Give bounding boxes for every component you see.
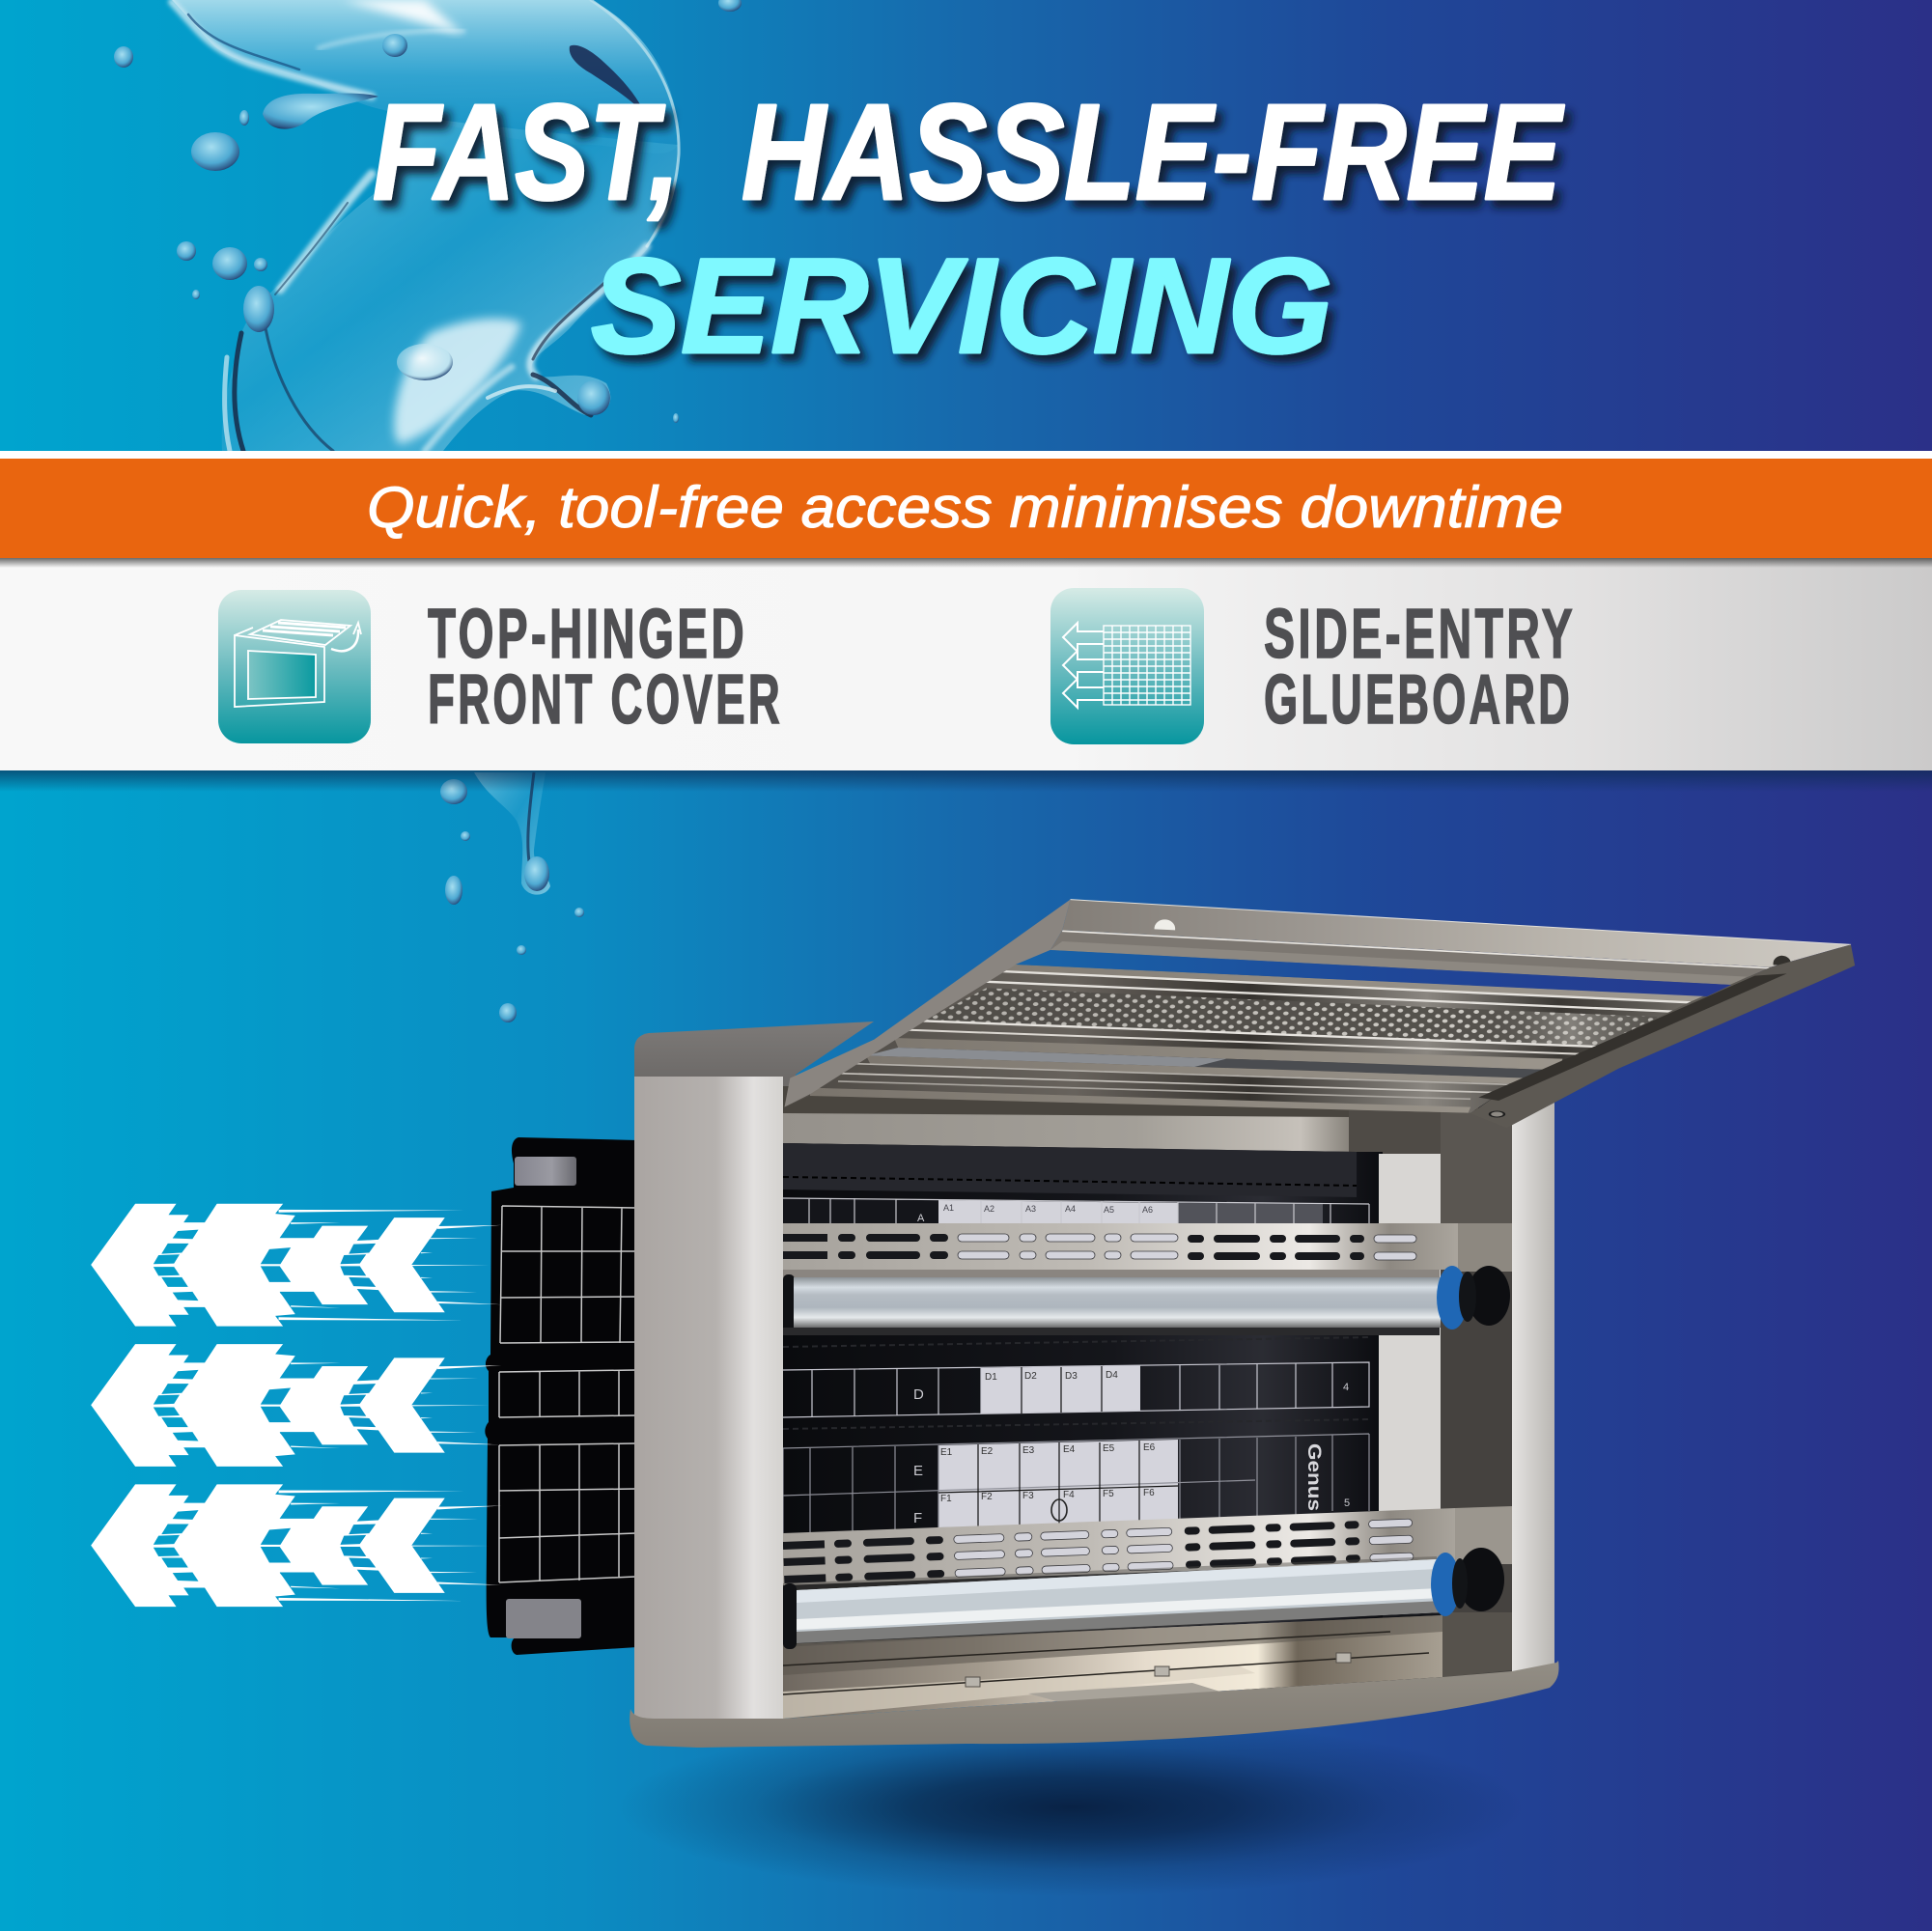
row A cells xyxy=(783,1198,1369,1224)
rows below the top plate xyxy=(783,1362,1369,1535)
bottom cap xyxy=(630,1661,1559,1748)
lower perforated plate xyxy=(783,1506,1512,1585)
interior back xyxy=(783,1086,1517,1690)
speed arrows row 1 xyxy=(91,1204,501,1327)
splash: highlights and dark edges xyxy=(172,0,679,451)
black glueboard inside: D4 xyxy=(1106,1370,1118,1381)
black glueboard inside: E5 xyxy=(1103,1443,1115,1454)
black glueboard inside: E1 xyxy=(940,1447,953,1458)
feature text: side-entry glueboard xyxy=(1264,596,1576,739)
hinged front cover xyxy=(784,900,1855,1128)
row A cells: A6 xyxy=(1142,1205,1153,1215)
orange subtitle banner: Quick, tool-free access minimises downtime xyxy=(367,475,1563,540)
black glueboard inside: E2 xyxy=(981,1446,994,1457)
row A cells: A5 xyxy=(1104,1205,1114,1215)
black glueboard inside: D1 xyxy=(985,1372,997,1383)
black glueboard inside: F5 xyxy=(1103,1489,1114,1499)
top metal panel xyxy=(780,1067,1478,1155)
row A cells: A2 xyxy=(984,1204,994,1214)
black glueboard inside: D3 xyxy=(1065,1371,1078,1382)
black glueboard inside: E xyxy=(913,1463,923,1479)
row A cells: A1 xyxy=(943,1203,954,1213)
lower UV tube xyxy=(783,1548,1504,1649)
black glueboard inside: E3 xyxy=(1022,1445,1035,1456)
feature text: side-entry glueboard: SIDE-ENTRY xyxy=(1264,596,1576,673)
row A cells: A xyxy=(917,1213,925,1224)
splash: glare patches xyxy=(394,319,521,444)
lower metal tray xyxy=(783,1612,1512,1719)
black glueboard inside xyxy=(783,1143,1383,1651)
lower water drip xyxy=(440,772,584,1022)
black glueboard inside: F xyxy=(913,1510,922,1526)
perforated vent area xyxy=(926,988,1659,1046)
cover left rail xyxy=(784,900,1070,1107)
black glueboard inside: F2 xyxy=(981,1492,993,1502)
black glueboard inside: Genus xyxy=(1303,1443,1324,1511)
glueboard grid xyxy=(499,1206,635,1582)
black glueboard inside: F6 xyxy=(1143,1488,1155,1498)
icon: side-entry glueboard xyxy=(1050,588,1204,744)
feature text: top-hinged front cover: FRONT COVER xyxy=(428,661,783,739)
feature text: top-hinged front cover: TOP-HINGED xyxy=(428,596,747,673)
feature text: side-entry glueboard: GLUEBOARD xyxy=(1264,661,1573,739)
black glueboard inside: D xyxy=(913,1386,924,1403)
icon: top-hinged front cover xyxy=(218,590,371,743)
title: SERVICING xyxy=(591,230,1332,381)
splash: dark streak in upper lobe xyxy=(570,45,645,114)
grey feature panel xyxy=(0,558,1932,770)
speed arrows row 2 xyxy=(91,1344,501,1467)
water splash illustration xyxy=(114,0,742,451)
right pillar xyxy=(1512,1103,1554,1673)
white rule above orange banner xyxy=(0,451,1932,459)
panel shadow xyxy=(0,770,1932,792)
drops around the splash xyxy=(114,0,742,423)
cover opening xyxy=(1016,950,1731,996)
floor shadow under product xyxy=(618,1719,1526,1896)
right interior side wall xyxy=(1441,1110,1512,1680)
upper UV tube xyxy=(783,1266,1510,1335)
title: HASSLE-FREE xyxy=(742,75,1564,228)
top perforated plate xyxy=(783,1223,1512,1272)
black glueboard inside: F1 xyxy=(940,1494,952,1504)
splash: mid body xyxy=(222,114,678,451)
black glueboard inside: E4 xyxy=(1063,1444,1076,1455)
row A cells: A3 xyxy=(1025,1204,1036,1214)
cover: slat tray underside xyxy=(784,965,1707,1113)
speed arrows row 3 xyxy=(91,1484,501,1607)
splash: upper lobe xyxy=(172,0,678,154)
black glueboard inside: D2 xyxy=(1024,1371,1037,1382)
black glueboard inside: 5 xyxy=(1344,1497,1350,1509)
title xyxy=(373,75,1564,381)
feature text: top-hinged front cover xyxy=(428,596,783,739)
black glueboard inside: 4 xyxy=(1343,1382,1349,1393)
title: FAST, xyxy=(373,75,680,228)
left pillar xyxy=(634,1077,783,1719)
product: insect trap unit xyxy=(630,900,1855,1748)
cover: slats and vent xyxy=(810,965,1707,1113)
cover right rail xyxy=(1470,944,1855,1128)
glueboard sliding out of the side xyxy=(485,1137,637,1655)
white inner column xyxy=(1379,1154,1441,1540)
black glueboard inside: F4 xyxy=(1063,1490,1075,1500)
top cap xyxy=(634,1021,874,1078)
black glueboard inside: F3 xyxy=(1022,1491,1034,1501)
orange subtitle banner xyxy=(0,459,1932,558)
black glueboard inside: E6 xyxy=(1143,1442,1156,1453)
row A cells: A4 xyxy=(1065,1204,1076,1214)
cover: front lip xyxy=(1050,900,1851,985)
glueboard grey tabs xyxy=(506,1157,581,1638)
